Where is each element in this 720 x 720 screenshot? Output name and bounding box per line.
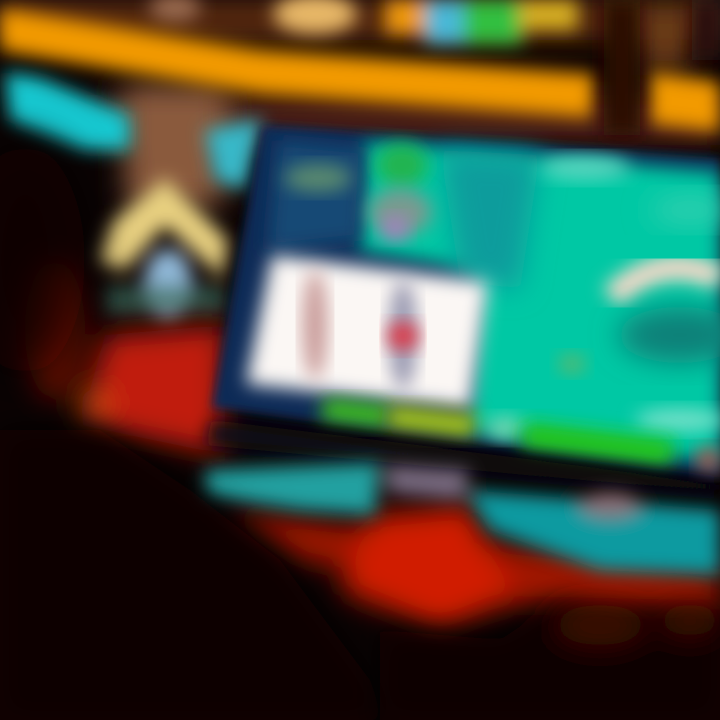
background: upper wall — [0, 0, 720, 205]
signage: colored lights at top — [149, 0, 578, 44]
green button right — [520, 422, 675, 466]
table column: left — [303, 270, 327, 380]
semicircle gauge — [612, 268, 720, 298]
gauge base — [618, 307, 720, 363]
teal screen — [360, 142, 720, 462]
green logo — [376, 143, 428, 187]
yellow chevron figure — [98, 178, 228, 321]
tablet frame — [212, 125, 720, 478]
dark tablet lower edge — [205, 420, 720, 494]
red seat — [25, 260, 225, 455]
dark silhouette — [0, 145, 85, 375]
red corner button — [696, 446, 720, 474]
green buttons — [320, 398, 390, 428]
navy header panel — [268, 140, 365, 250]
lower red surface — [225, 505, 720, 630]
teal reflections — [205, 462, 720, 575]
dark post — [604, 0, 720, 135]
small orange mark — [558, 354, 586, 374]
orange band — [0, 8, 720, 132]
tablet — [212, 125, 720, 478]
pale button — [485, 416, 525, 440]
red table cell — [388, 322, 418, 350]
lower right shadow — [380, 600, 720, 720]
foreground silhouette — [0, 430, 385, 720]
multicolor logo — [368, 188, 432, 236]
top highlight — [540, 156, 630, 180]
table column: right — [389, 280, 417, 390]
cyan light shape — [5, 72, 262, 190]
yellow-green button — [385, 405, 478, 438]
teal top strip — [440, 150, 540, 290]
header logo text — [284, 164, 352, 192]
lower light patch — [635, 408, 720, 432]
white table panel — [246, 255, 488, 408]
